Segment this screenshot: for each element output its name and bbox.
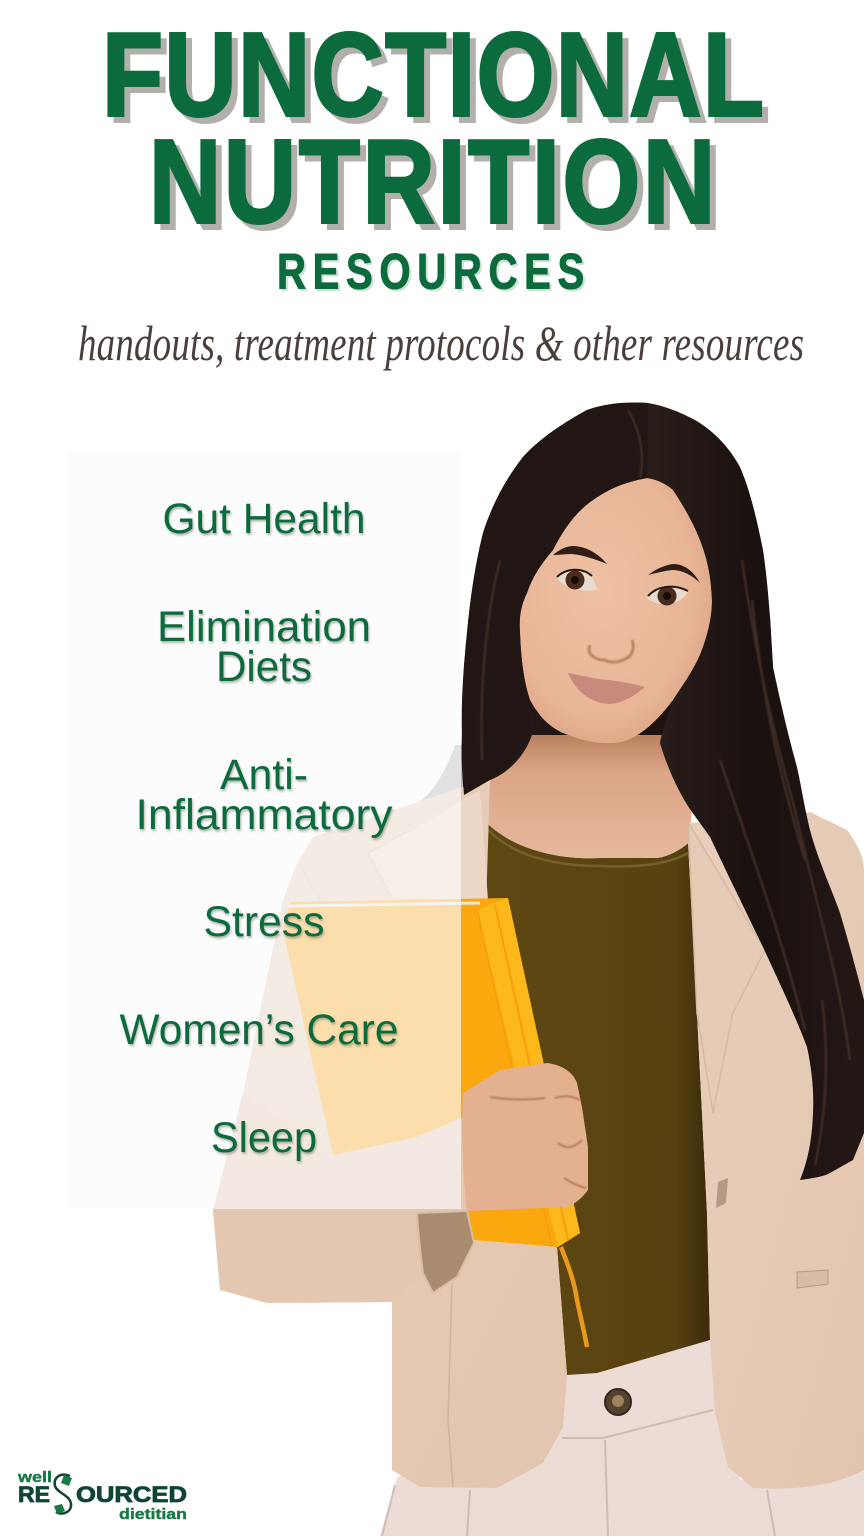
hair strand highlights bbox=[482, 410, 850, 1165]
topic: elimination diets: Diets bbox=[216, 643, 312, 691]
title: NUTRITION bbox=[149, 116, 715, 248]
topic: gut health: Gut Health bbox=[162, 495, 366, 543]
topic: women's care: Women’s Care bbox=[120, 1006, 398, 1054]
bookmark ribbon bbox=[561, 1247, 587, 1347]
title bbox=[102, 9, 764, 248]
topic: stress: Stress bbox=[204, 898, 324, 946]
book pages bbox=[288, 903, 480, 906]
face bbox=[520, 478, 712, 743]
logo: well resourced dietitian bbox=[17, 1469, 187, 1523]
pants bbox=[380, 1340, 864, 1536]
neck and chest bbox=[472, 735, 692, 858]
subtitle: RESOURCES bbox=[277, 243, 584, 300]
nose bbox=[589, 640, 633, 662]
topic: elimination diets: Elimination bbox=[157, 603, 371, 651]
shadow behind shoulder bbox=[418, 745, 470, 802]
logo: well resourced dietitian: well bbox=[17, 1469, 52, 1486]
book cover bbox=[283, 898, 580, 1247]
topic: anti-inflammatory: Inflammatory bbox=[136, 791, 393, 839]
pant button bbox=[605, 1389, 631, 1415]
topic: sleep: Sleep bbox=[211, 1114, 317, 1162]
jacket left body bbox=[213, 780, 567, 1488]
logo: well resourced dietitian: dietitian bbox=[119, 1506, 187, 1523]
illustration: woman holding a yellow book bbox=[213, 403, 864, 1536]
tagline: handouts, treatment protocols & other resources bbox=[78, 316, 804, 371]
icon: money S bbox=[54, 1475, 72, 1514]
jacket pocket flap bbox=[797, 1270, 828, 1288]
eyebrows bbox=[553, 546, 607, 564]
front hair left bbox=[462, 403, 648, 795]
book spine bbox=[477, 898, 580, 1247]
eyes bbox=[557, 570, 597, 591]
logo: well resourced dietitian: RE bbox=[18, 1482, 50, 1507]
jacket button detail bbox=[716, 1178, 728, 1208]
olive top bbox=[480, 815, 710, 1375]
lips bbox=[568, 673, 645, 704]
hand bbox=[462, 1063, 588, 1211]
front hair right bbox=[647, 403, 864, 1180]
pants waistband and fly bbox=[382, 1410, 775, 1536]
hair back layer bbox=[462, 403, 773, 800]
jacket right body bbox=[688, 812, 864, 1489]
title: FUNCTIONAL bbox=[102, 9, 764, 141]
topic: anti-inflammatory bbox=[136, 751, 393, 839]
jacket right lapel bbox=[688, 822, 765, 1113]
topic: anti-inflammatory: Anti- bbox=[220, 751, 308, 799]
jacket left seam bbox=[448, 1283, 453, 1487]
left sleeve bbox=[213, 1093, 468, 1303]
neckline stitching bbox=[483, 824, 690, 866]
cuff bbox=[417, 1211, 474, 1293]
finger creases bbox=[490, 1096, 586, 1188]
logo: well resourced dietitian: OURCED bbox=[76, 1482, 187, 1507]
translucent panel bbox=[67, 452, 461, 1209]
left lapel bbox=[368, 790, 488, 900]
topic list bbox=[120, 495, 398, 1162]
topic: elimination diets bbox=[157, 603, 371, 691]
